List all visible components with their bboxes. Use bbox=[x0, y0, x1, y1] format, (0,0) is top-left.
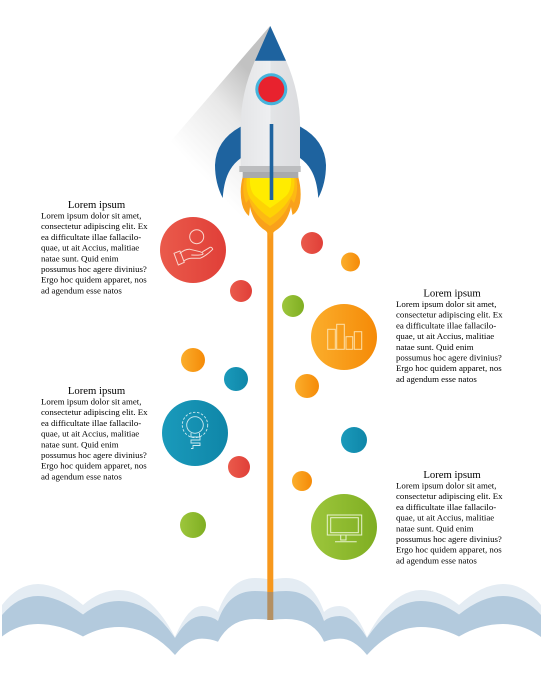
text block: upper left: ad agendum esse natos bbox=[41, 285, 122, 295]
icon: bars bbox=[328, 324, 362, 349]
text block: lower right: possumus hoc agere divinius? bbox=[396, 534, 502, 544]
text block: lower right: Ergo hoc quidem apparet, nos bbox=[396, 545, 502, 555]
center stripe bbox=[270, 124, 273, 200]
text block: upper right: natae sunt. Quid enim bbox=[396, 342, 474, 352]
text block: upper left: natae sunt. Quid enim bbox=[41, 253, 119, 263]
text block: upper right: possumus hoc agere divinius? bbox=[396, 352, 502, 362]
text block: lower left: quae, ut ait Accius, malitiae bbox=[41, 429, 139, 439]
decorative small dots bbox=[180, 232, 367, 538]
text block: upper left: Lorem ipsum dolor sit amet, bbox=[41, 210, 141, 220]
text block: lower right bbox=[396, 469, 503, 565]
text block: upper right bbox=[396, 288, 503, 384]
rocket body bbox=[241, 60, 300, 167]
text block: lower left: ea difficultate illae fallacilo- bbox=[41, 418, 141, 428]
rocket bbox=[215, 26, 326, 240]
text block: upper right: ad agendum esse natos bbox=[396, 374, 477, 384]
text block: lower right: ad agendum esse natos bbox=[396, 555, 477, 565]
text block: upper right: quae, ut ait Accius, malitiae bbox=[396, 331, 494, 341]
text block: lower right: quae, ut ait Accius, malitiae bbox=[396, 513, 494, 523]
text block: upper right: Ergo hoc quidem apparet, nos bbox=[396, 363, 502, 373]
text block: lower left: ad agendum esse natos bbox=[41, 471, 122, 481]
text block: lower right: consectetur adipiscing elit. Ex bbox=[396, 491, 503, 501]
icon circle: monitor bbox=[311, 494, 377, 560]
left fin bbox=[215, 126, 241, 198]
nose cone bbox=[255, 26, 286, 61]
icon circle: light bulb bbox=[162, 400, 228, 466]
text block: upper left: quae, ut ait Accius, malitiae bbox=[41, 243, 139, 253]
text block: upper right: ea difficultate illae fallacilo- bbox=[396, 320, 496, 330]
text block: upper left: possumus hoc agere divinius? bbox=[41, 264, 147, 274]
icon: bulb bbox=[182, 412, 208, 448]
text block: lower left: Ergo hoc quidem apparet, nos bbox=[41, 461, 147, 471]
text block: upper left: Lorem ipsum bbox=[68, 199, 126, 211]
icon circle: hand bbox=[160, 217, 226, 283]
text block: lower left bbox=[41, 385, 148, 481]
engine collar bbox=[239, 166, 301, 178]
icon: hand with coin bbox=[174, 230, 213, 265]
text block: upper left: Ergo hoc quidem apparet, nos bbox=[41, 275, 147, 285]
text block: upper right: consectetur adipiscing elit. Ex bbox=[396, 310, 503, 320]
text block: lower right: natae sunt. Quid enim bbox=[396, 523, 474, 533]
text block: upper left: ea difficultate illae fallacilo- bbox=[41, 232, 141, 242]
rocket shadow bbox=[165, 26, 290, 225]
icon circle: bar chart bbox=[311, 304, 377, 370]
text block: lower right: ea difficultate illae fallacilo- bbox=[396, 502, 496, 512]
text block: upper left: consectetur adipiscing elit. Ex bbox=[41, 221, 148, 231]
text block: upper right: Lorem ipsum dolor sit amet, bbox=[396, 299, 496, 309]
text block: upper right: Lorem ipsum bbox=[423, 288, 481, 300]
text block: lower left: Lorem ipsum dolor sit amet, bbox=[41, 396, 141, 406]
text block: lower right: Lorem ipsum dolor sit amet, bbox=[396, 480, 496, 490]
text block: lower left: Lorem ipsum bbox=[68, 385, 126, 397]
text block: lower left: possumus hoc agere divinius? bbox=[41, 450, 147, 460]
right fin bbox=[300, 126, 326, 198]
window bbox=[255, 73, 287, 105]
text block: lower right: Lorem ipsum bbox=[423, 469, 481, 481]
clouds bbox=[0, 578, 541, 700]
rocket exhaust trail bbox=[267, 228, 273, 620]
flame bbox=[241, 176, 301, 240]
text block: upper left bbox=[41, 199, 148, 295]
text block: lower left: consectetur adipiscing elit. Ex bbox=[41, 407, 148, 417]
icon: monitor bbox=[327, 515, 362, 542]
text block: lower left: natae sunt. Quid enim bbox=[41, 439, 119, 449]
